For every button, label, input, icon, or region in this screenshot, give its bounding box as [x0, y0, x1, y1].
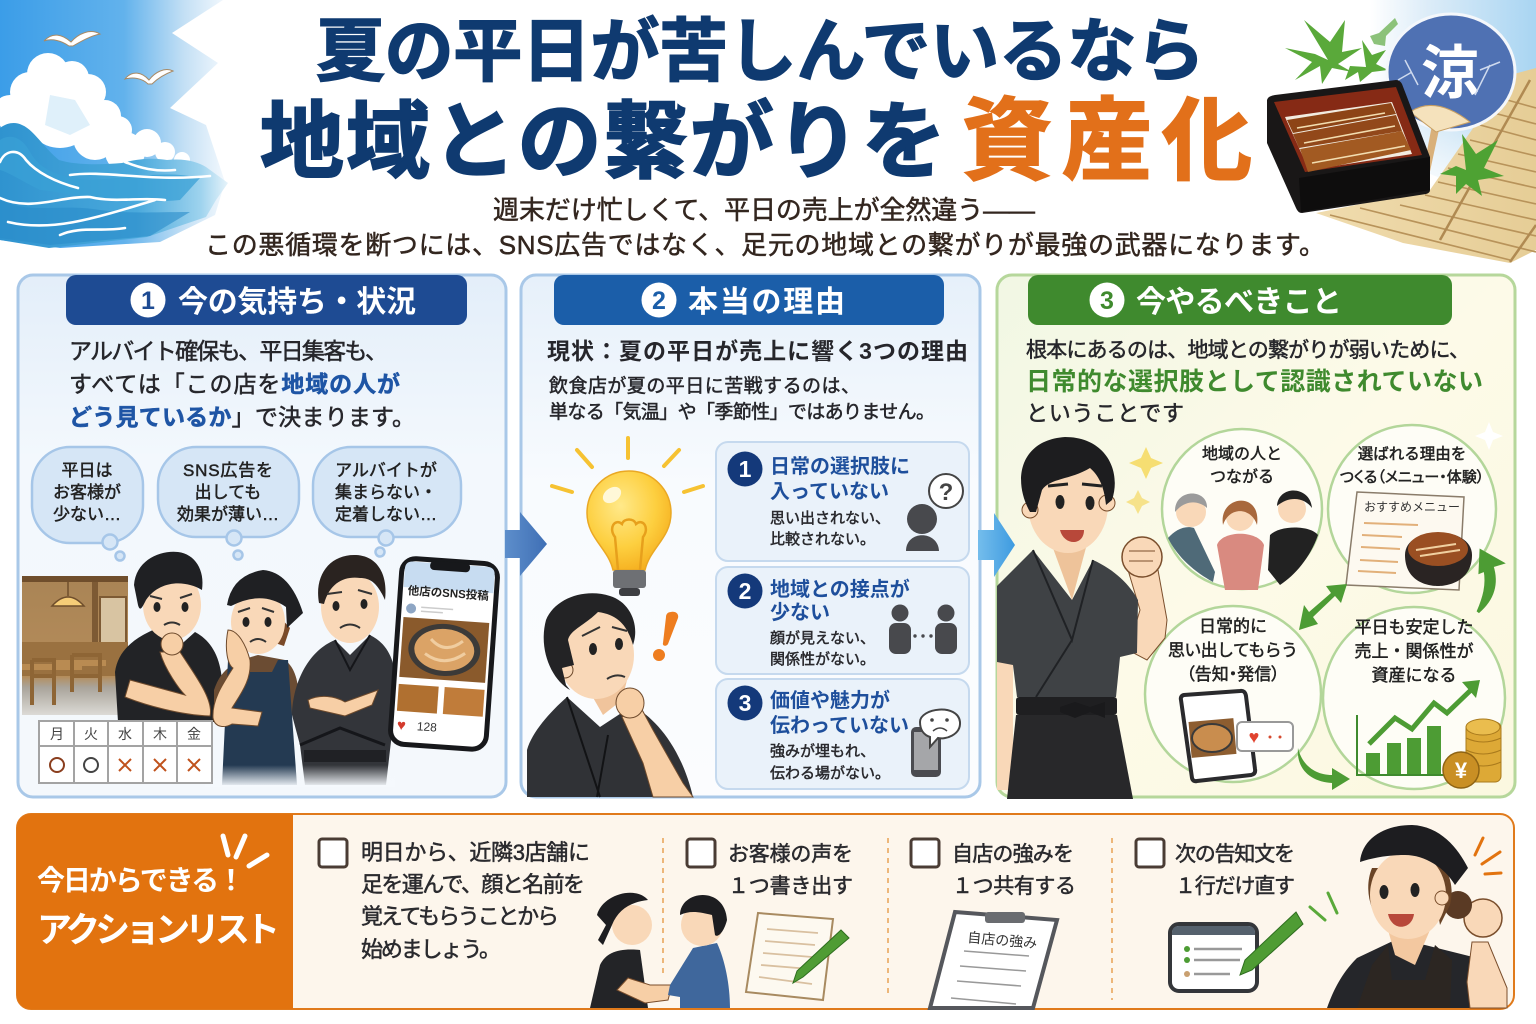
circle: stable sales become assets: 資産になる — [1372, 666, 1456, 685]
illustration: thinking owner — [527, 593, 693, 797]
card: reason 1: 比較されない。 — [770, 531, 875, 548]
chart: weekday calendar: 火 — [84, 726, 98, 742]
circle: stable sales become assets: 売上・関係性が — [1354, 642, 1474, 661]
hero illustration: sky, clouds and waves — [0, 0, 228, 248]
checklist item 1 — [319, 839, 590, 962]
illustration: worried woman in apron — [213, 570, 303, 785]
callout: thought bubble part-time staff: 集まらない・ — [335, 483, 437, 502]
subtitle: この悪循環を断つには、SNS広告ではなく、足元の地域との繋がりが最強の武器になります。 — [205, 230, 1325, 260]
text block: intro: すべては「この店を地域の人が — [69, 371, 400, 397]
text block: root cause: 根本にあるのは、地域との繋がりが弱いために、 — [1026, 339, 1470, 362]
title: 夏の平日が苦しんでいるなら — [316, 13, 1205, 90]
text block: intro: どう見ているか」で決まります。 — [69, 404, 415, 430]
panel: current feelings and situation — [18, 275, 506, 797]
heading: section 1: 今の気持ち・状況 — [178, 286, 416, 319]
callout: thought bubble SNS ads — [158, 447, 299, 560]
arrow: panel 2 to panel 3 — [978, 513, 1015, 577]
circle: be remembered daily: 思い出してもらう — [1168, 641, 1298, 660]
text block: reasons summary: 単なる「気温」や「季節性」ではありません。 — [549, 401, 935, 423]
icon: person with question mark: ? — [939, 479, 953, 506]
callout: thought bubble SNS ads: 出しても — [195, 483, 261, 502]
card: reason 3: 伝わる場がない。 — [770, 765, 890, 782]
illustration: phone with other shop SNS post: 他店のSNS投稿 — [407, 583, 489, 603]
hero illustration: unagi box, fan and leaves — [1267, 0, 1536, 263]
card: reason 3: 伝わっていない — [770, 714, 909, 737]
text block: intro: アルバイト確保も、平日集客も、 — [69, 338, 388, 364]
arrow: panel 1 to panel 2 — [505, 512, 547, 576]
icon: unagi box — [1267, 80, 1430, 213]
divider — [663, 838, 1112, 1000]
arrow: double arrow between circles — [1299, 584, 1347, 630]
title: 資産化 — [962, 92, 1252, 192]
checklist item 2: １つ書き出す — [728, 875, 853, 898]
callout: thought bubble part-time staff: アルバイトが — [335, 461, 437, 480]
icon: person with question mark — [906, 474, 963, 551]
arrow: curved arrow to sales circle — [1298, 748, 1350, 790]
card: reason 1: 入っていない — [770, 480, 889, 503]
callout: thought bubble weekday customers — [32, 447, 143, 560]
panel: the real reasons — [521, 275, 980, 797]
illustration: smiling owner with raised fist — [997, 422, 1503, 799]
icon: light bulb — [552, 438, 703, 596]
card: reason 3 — [716, 679, 969, 789]
text block: root cause — [1026, 339, 1483, 426]
icon: coin stack with yen: ¥ — [1455, 758, 1468, 783]
chart: weekday calendar — [39, 721, 212, 783]
illustration: owner with crossed arms — [292, 555, 396, 785]
circle: create reasons to be chosen — [1328, 425, 1496, 593]
card: reason 2: 関係性がない。 — [770, 651, 875, 668]
checklist item 1: 始めましょう。 — [361, 937, 501, 962]
callout: thought bubble weekday customers: 少ない… — [53, 505, 121, 524]
chart: weekday calendar: 月 — [50, 726, 64, 742]
icon: coin stack with yen — [1443, 719, 1501, 788]
checklist item 4: 次の告知文を — [1175, 843, 1295, 866]
chart: weekday calendar: 水 — [118, 726, 132, 742]
circle: create reasons to be chosen: おすすめメニュー — [1364, 500, 1460, 514]
checklist item 1: 足を運んで、顔と名前を — [361, 872, 585, 897]
illustration: handshake — [590, 893, 730, 1008]
circle: connect with locals — [1162, 429, 1322, 590]
text block: reasons summary — [547, 338, 968, 423]
circle: stable sales become assets — [1323, 607, 1505, 789]
text block: intro — [69, 338, 415, 430]
checklist item 4: １行だけ直す — [1175, 875, 1295, 898]
heading: action list badge: アクションリスト — [37, 911, 280, 950]
heading: action list badge — [17, 814, 293, 1009]
illustration: clipboard of strengths: 自店の強み — [967, 929, 1038, 951]
heading: action list badge: 今日からできる！ — [37, 865, 245, 896]
chart: weekday calendar: 金 — [187, 726, 201, 742]
card: reason 2: 顔が見えない、 — [770, 630, 875, 647]
card: reason 2: 地域との接点が — [770, 577, 910, 601]
circle: connect with locals: 地域の人と — [1202, 445, 1282, 463]
icon: seagulls — [44, 32, 173, 84]
heading: section 2 — [554, 275, 944, 325]
icon: round fan — [1387, 14, 1515, 190]
illustration: owner thinking — [115, 552, 222, 722]
illustration: note and pencil — [746, 913, 849, 1000]
checklist item 2: お客様の声を — [728, 843, 853, 866]
illustration: empty restaurant interior — [22, 576, 128, 715]
circle: connect with locals: つながる — [1210, 468, 1274, 486]
title — [260, 13, 1252, 192]
card: reason 2: 2 — [739, 578, 751, 604]
icon: two unconnected people — [889, 604, 957, 654]
callout: thought bubble weekday customers: 平日は — [62, 461, 112, 480]
arrow: curved arrow to reasons circle — [1478, 551, 1502, 612]
card: reason 3: 価値や魅力が — [770, 688, 890, 712]
checklist item 1: 覚えてもらうことから — [361, 904, 559, 929]
circle: be remembered daily: （告知・発信） — [1186, 665, 1280, 684]
heading: section 3: 今やるべきこと — [1136, 286, 1342, 319]
illustration: phone with other shop SNS post — [390, 558, 498, 750]
circle: be remembered daily: ♥ — [1249, 727, 1259, 747]
card: reason 1: 1 — [739, 456, 752, 482]
illustration: tablet and pencil — [1170, 893, 1337, 991]
panel: action list — [17, 814, 1514, 1009]
heading: section 1 — [66, 275, 467, 325]
subtitle — [205, 195, 1325, 260]
checklist item 4 — [1136, 839, 1295, 898]
callout: thought bubble part-time staff: 定着しない… — [335, 505, 437, 524]
icon: phone with sad speech bubble — [911, 710, 960, 777]
callout: thought bubble SNS ads: SNS広告を — [183, 461, 273, 480]
circle: create reasons to be chosen: つくる（メニュー・体験） — [1340, 469, 1484, 486]
card: reason 3: 3 — [739, 690, 751, 716]
callout: thought bubble weekday customers: お客様が — [53, 483, 121, 502]
illustration: clipboard of strengths — [930, 912, 1057, 1008]
callout: thought bubble SNS ads: 効果が薄い… — [177, 505, 279, 524]
panel: what to do now — [997, 275, 1515, 799]
icon: round fan: 涼 — [1421, 41, 1479, 106]
checklist item 3: 自店の強みを — [952, 843, 1074, 866]
checklist item 2 — [687, 839, 853, 898]
illustration: phone with other shop SNS post: ♥ — [396, 717, 406, 734]
circle: be remembered daily — [1145, 606, 1321, 782]
circle: stable sales become assets: 平日も安定した — [1354, 618, 1474, 637]
chart: rising bars and trend line — [1357, 680, 1480, 775]
card: reason 1 — [716, 442, 969, 561]
chart: weekday calendar: 木 — [153, 726, 167, 742]
card: reason 1: 思い出されない、 — [770, 510, 890, 527]
checklist item 1: 明日から、近隣3店舗に — [361, 840, 590, 865]
illustration: cheerful staff member — [1327, 825, 1507, 1008]
heading: section 2: 本当の理由 — [688, 286, 845, 319]
card: reason 2 — [716, 567, 969, 674]
illustration: phone with other shop SNS post: 128 — [416, 719, 438, 735]
icon: exclamation mark — [653, 612, 678, 661]
subtitle: 週末だけ忙しくて、平日の売上が全然違う―― — [493, 195, 1035, 225]
card: reason 1: 日常の選択肢に — [770, 455, 910, 478]
heading: section 1: 1 — [141, 287, 155, 315]
circle: be remembered daily: 日常的に — [1199, 617, 1267, 636]
heading: section 3: 3 — [1100, 287, 1114, 315]
title: 地域との繋がりを — [260, 95, 946, 189]
callout: thought bubble part-time staff — [313, 447, 461, 556]
card: reason 2: 少ない — [770, 601, 830, 624]
checklist item 3 — [911, 839, 1076, 898]
icon: maple leaves — [1285, 18, 1398, 84]
card: reason 3: 強みが埋もれ、 — [770, 743, 875, 760]
text block: reasons summary: 飲食店が夏の平日に苦戦するのは、 — [549, 375, 860, 397]
heading: section 3 — [1028, 275, 1452, 325]
text block: reasons summary: 現状：夏の平日が売上に響く3つの理由 — [547, 338, 968, 364]
heading: section 2: 2 — [652, 287, 666, 315]
text block: root cause: 日常的な選択肢として認識されていない — [1026, 368, 1483, 396]
checklist item 3: １つ共有する — [952, 875, 1076, 898]
circle: create reasons to be chosen: 選ばれる理由を — [1358, 445, 1466, 463]
text block: root cause: ということです — [1026, 401, 1184, 426]
